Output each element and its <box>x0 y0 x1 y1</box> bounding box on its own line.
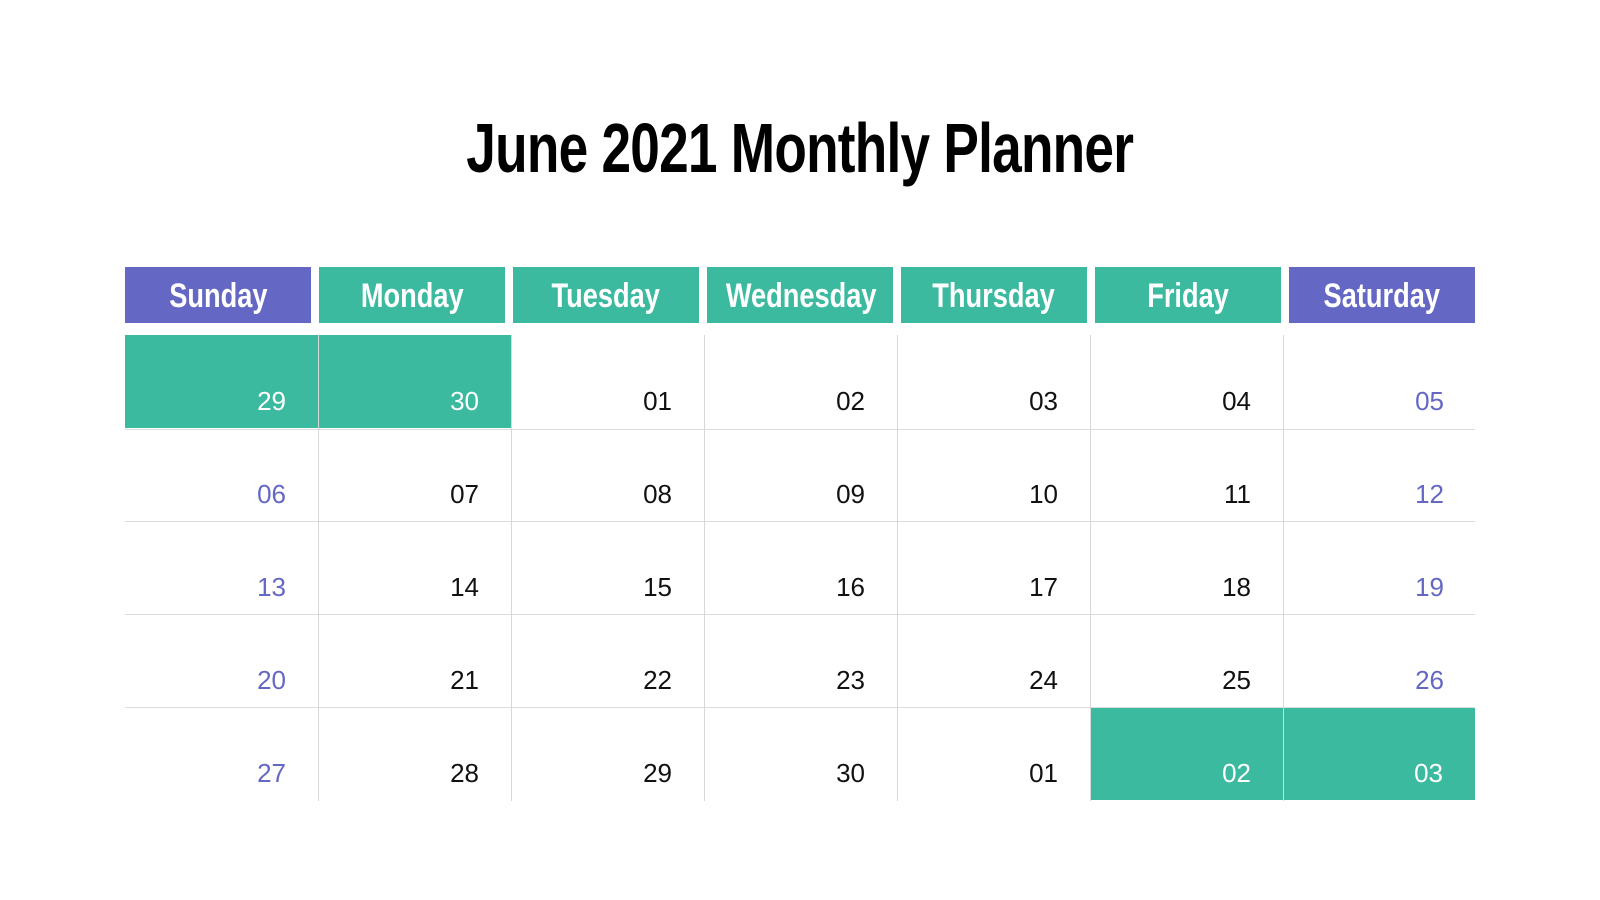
header: Sunday <box>125 267 311 323</box>
calendar grid: 22 <box>643 665 672 695</box>
header: Thursday: Thursday <box>933 277 1055 315</box>
calendar grid: 09 <box>836 479 865 509</box>
calendar grid: 11 <box>1224 479 1251 509</box>
calendar grid: 03 <box>1414 758 1443 788</box>
calendar grid: 21 <box>450 665 479 695</box>
header: Tuesday <box>513 267 699 323</box>
calendar grid: 05 <box>1415 386 1444 416</box>
calendar grid: 29 <box>643 758 672 788</box>
calendar grid: 15 <box>643 572 672 602</box>
calendar grid: 23 <box>836 665 865 695</box>
calendar grid: 26 <box>1415 665 1444 695</box>
header: Monday <box>319 267 505 323</box>
header: Saturday: Saturday <box>1324 277 1440 315</box>
calendar grid: 30 <box>836 758 865 788</box>
calendar grid: 10 <box>1029 479 1058 509</box>
calendar grid: 01 <box>1029 758 1058 788</box>
calendar grid: 17 <box>1029 572 1058 602</box>
calendar grid: 19 <box>1415 572 1444 602</box>
header: Friday: Friday <box>1147 277 1229 315</box>
calendar grid: 20 <box>257 665 286 695</box>
calendar grid: 07 <box>450 479 479 509</box>
calendar grid: 06 <box>257 479 286 509</box>
calendar grid: 13 <box>257 572 286 602</box>
title: June 2021 Monthly Planner <box>467 109 1133 187</box>
calendar grid: 04 <box>1222 386 1251 416</box>
calendar grid: 14 <box>450 572 479 602</box>
header: Friday <box>1095 267 1281 323</box>
calendar grid: 08 <box>643 479 672 509</box>
calendar grid: 25 <box>1222 665 1251 695</box>
calendar grid: 12 <box>1415 479 1444 509</box>
calendar grid: 29 <box>257 386 286 416</box>
calendar grid: 01 <box>643 386 672 416</box>
calendar grid: 02 <box>1222 758 1251 788</box>
calendar grid: 18 <box>1222 572 1251 602</box>
calendar grid: 03 <box>1029 386 1058 416</box>
header: Thursday <box>901 267 1087 323</box>
header: Saturday <box>1289 267 1475 323</box>
calendar grid: 24 <box>1029 665 1058 695</box>
calendar grid: 02 <box>836 386 865 416</box>
header: Monday: Monday <box>361 277 463 315</box>
header: Sunday: Sunday <box>169 277 267 315</box>
header: Wednesday <box>707 267 893 323</box>
calendar grid: 16 <box>836 572 865 602</box>
header: Wednesday: Wednesday <box>726 277 876 315</box>
calendar grid: 30 <box>450 386 479 416</box>
calendar grid: 28 <box>450 758 479 788</box>
header: Tuesday: Tuesday <box>552 277 660 315</box>
calendar grid: 27 <box>257 758 286 788</box>
